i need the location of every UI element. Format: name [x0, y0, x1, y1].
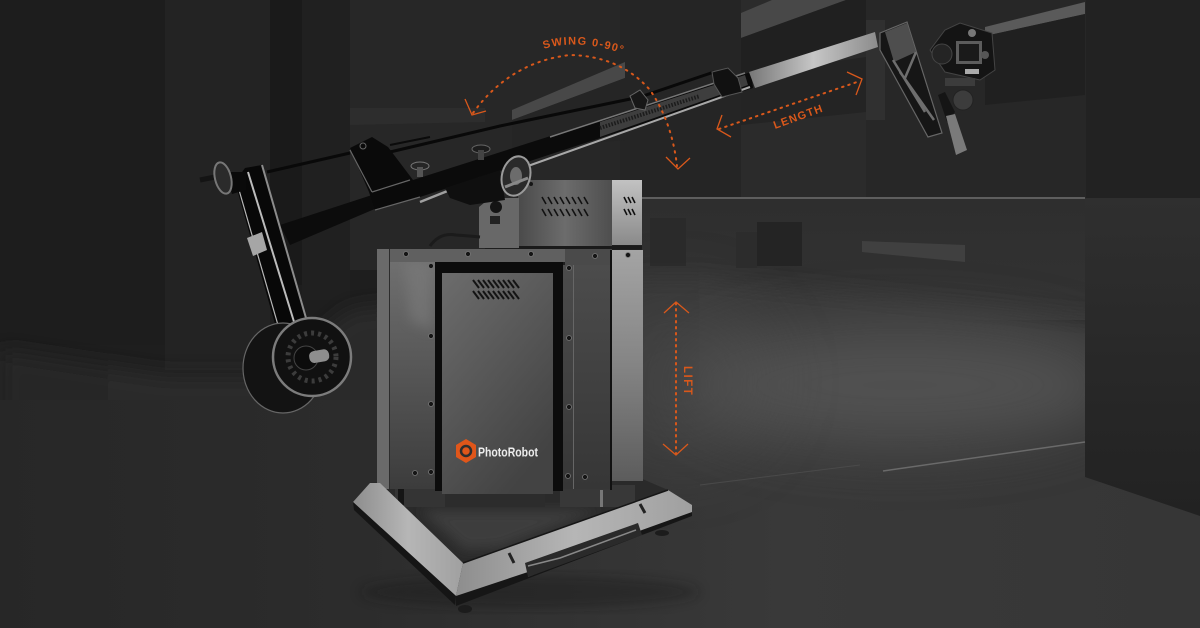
lift label: LIFT: [681, 366, 693, 396]
box vents: [542, 197, 635, 216]
arm thin rod: [390, 137, 430, 145]
annotation: swing 0-90 degrees: [464, 36, 690, 170]
annotation: lift: [663, 302, 693, 455]
background: right wall block: [1085, 198, 1200, 516]
tower screws: [404, 252, 630, 480]
arm main black beam: [280, 195, 377, 245]
tower door frame: [435, 262, 563, 491]
lift arrow heads: [663, 302, 689, 455]
arm silver extension: [749, 32, 878, 88]
top control box: [430, 180, 642, 249]
arm end bracket: [880, 22, 942, 137]
robotic arm: [200, 22, 995, 413]
swing label: SWING 0-90°: [542, 36, 624, 51]
background: back wall: [642, 199, 1085, 320]
cable: [430, 234, 480, 246]
counterweight bar: [235, 165, 306, 332]
annotation: length: [717, 72, 862, 137]
gearbox: [479, 198, 519, 248]
base feet: [458, 605, 472, 613]
length dotted line: [719, 81, 860, 129]
length label: LENGTH: [772, 103, 825, 132]
handwheel at gearbox: [497, 153, 535, 199]
tower door panel with vents: [442, 273, 553, 494]
arm clamp block: [350, 137, 420, 210]
base rails: [353, 483, 692, 613]
tower left column: [377, 249, 390, 489]
swing dotted arc: [473, 55, 677, 166]
swing arrow heads: [465, 99, 690, 169]
tower top rim: [390, 249, 565, 262]
lift dotted line: [675, 303, 677, 454]
arm knobs: [411, 162, 429, 170]
camera on head: [930, 23, 995, 155]
logo hexagon icon: [456, 439, 476, 463]
background: horizon ledge: [642, 197, 1085, 199]
arm rail: [413, 72, 753, 197]
logo: PhotoRobot: [456, 439, 539, 463]
base left rail: [353, 483, 463, 596]
base handle: [525, 523, 642, 577]
machine tower: [377, 248, 643, 494]
base arrows marks: [509, 504, 645, 563]
arm silver rod under rail: [420, 178, 480, 202]
counterweight plates: [243, 318, 351, 413]
base front rail: [456, 490, 692, 596]
arm top cable: [267, 72, 714, 172]
length arrow heads: [717, 72, 862, 137]
logo wordmark: PhotoRobot: [478, 444, 539, 460]
background: floor streak: [883, 442, 1085, 471]
box side: [612, 180, 642, 245]
background: floor light glow: [680, 325, 1120, 445]
background: upper wall panels: [0, 0, 1200, 370]
background: floor: [0, 278, 1200, 628]
tower feet: [395, 485, 635, 507]
counterweight rod wheel: [200, 161, 246, 195]
arm clamps: [630, 90, 648, 110]
tower right columns: [563, 265, 612, 489]
box front: [518, 180, 612, 248]
camera mount: [945, 78, 975, 86]
background: floor shadow under machine: [360, 576, 700, 608]
base platform floor: [370, 478, 668, 565]
background: back wall details: [650, 218, 965, 268]
